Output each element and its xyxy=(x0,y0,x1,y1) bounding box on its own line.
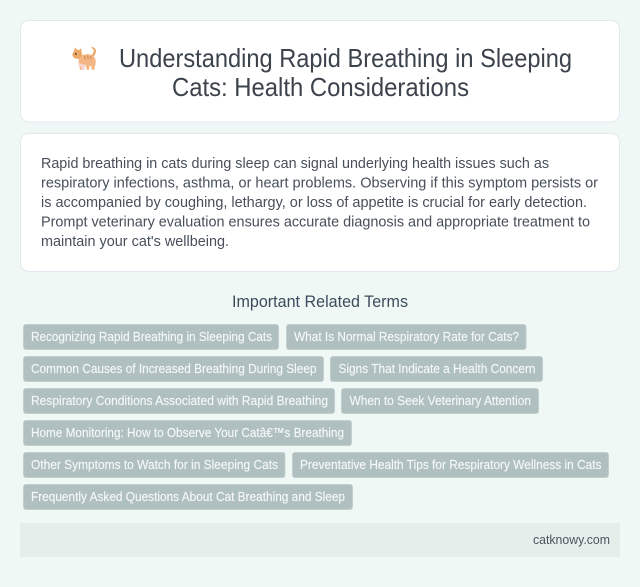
tag xyxy=(292,452,608,478)
tag: Home Monitoring: How to Observe Your Catâ€™s Breathing xyxy=(31,425,344,440)
panel: summary paragraph: is accompanied by coughing, lethargy, or loss of appetite is crucial for early detection. xyxy=(41,194,587,211)
tag: When to Seek Veterinary Attention xyxy=(350,393,531,408)
tag xyxy=(24,420,352,446)
tag xyxy=(24,452,285,478)
tag: Preventative Health Tips for Respiratory Wellness in Cats xyxy=(300,457,602,472)
tag xyxy=(24,484,352,510)
panel: summary paragraph: Prompt veterinary evaluation ensures accurate diagnosis and appropriate treatment to xyxy=(41,214,590,230)
title xyxy=(119,43,572,102)
tag: Recognizing Rapid Breathing in Sleeping Cats xyxy=(31,329,272,344)
footer xyxy=(20,523,620,557)
icon: orange cat xyxy=(72,47,96,70)
tag: What Is Normal Respiratory Rate for Cats? xyxy=(294,329,519,344)
tag: Signs That Indicate a Health Concern xyxy=(338,361,536,376)
panel: summary paragraph: respiratory infections, asthma, or heart problems. Observing if this symptom persists or xyxy=(41,174,598,192)
tag xyxy=(24,388,334,414)
panel: summary paragraph: Rapid breathing in cats during sleep can signal underlying health issues such as xyxy=(41,155,549,172)
panel: summary paragraph xyxy=(20,134,620,272)
title: Understanding Rapid Breathing in Sleeping xyxy=(119,43,572,73)
tag: Common Causes of Increased Breathing During Sleep xyxy=(31,361,316,376)
tag: Other Symptoms to Watch for in Sleeping Cats xyxy=(31,457,278,472)
heading: related terms: Important Related Terms xyxy=(232,293,408,311)
tag: Frequently Asked Questions About Cat Breathing and Sleep xyxy=(31,489,345,504)
tag xyxy=(342,388,538,414)
panel: summary paragraph: maintain your cat's wellbeing. xyxy=(41,233,229,250)
footer: catknowy.com xyxy=(533,532,610,547)
related term tags xyxy=(24,324,608,510)
tag xyxy=(330,356,542,382)
tag xyxy=(24,324,278,350)
tag: Respiratory Conditions Associated with Rapid Breathing xyxy=(31,393,328,408)
title: Cats: Health Considerations xyxy=(172,72,469,102)
tag xyxy=(24,356,324,382)
tag xyxy=(286,324,526,350)
header card xyxy=(20,20,620,122)
